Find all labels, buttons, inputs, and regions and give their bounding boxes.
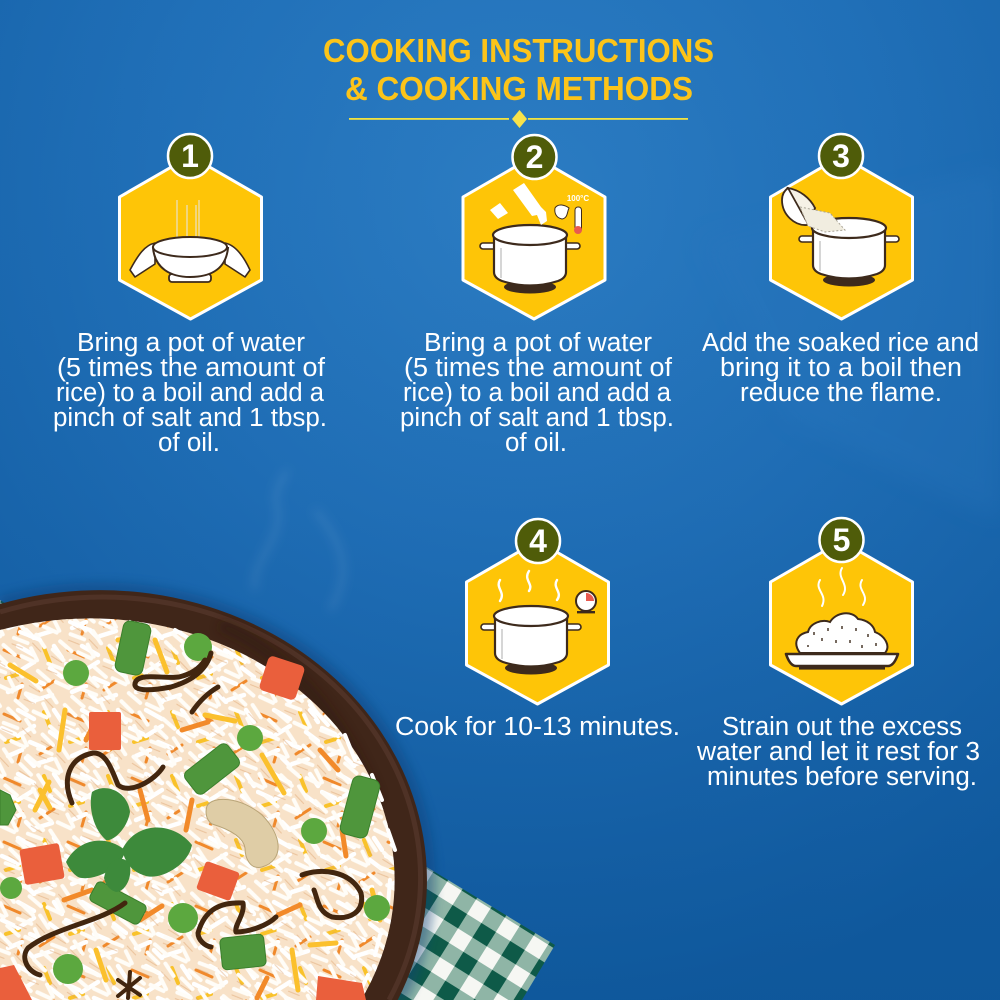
fried onion strands <box>25 653 362 998</box>
text: Bring a pot of water <box>424 329 653 357</box>
hexagon <box>120 156 262 319</box>
text: bring it to a boil then <box>720 354 962 382</box>
carrot cubes <box>0 655 366 1000</box>
mint leaves <box>66 788 192 892</box>
hexagon <box>770 541 912 704</box>
icon: bowl with rice <box>130 200 250 282</box>
number badge: 1 <box>181 138 199 174</box>
number badge <box>512 135 556 179</box>
number badge: 2 <box>526 139 543 175</box>
step 5 <box>696 518 980 791</box>
text <box>696 713 980 791</box>
text: water and let it rest for 3 <box>696 738 980 766</box>
green beans <box>0 620 381 970</box>
checked cloth <box>0 600 555 1000</box>
bowl of rice <box>0 582 435 1000</box>
step 1 <box>53 134 327 457</box>
title: & COOKING METHODS <box>345 71 693 108</box>
bowl <box>0 582 435 1000</box>
text <box>702 329 979 407</box>
text: Bring a pot of water <box>77 329 306 357</box>
number badge <box>819 134 863 178</box>
text: of oil. <box>158 429 220 457</box>
steam above the bowl <box>255 470 343 610</box>
text <box>400 329 674 457</box>
text: rice) to a boil and add a <box>56 379 325 407</box>
text: Add the soaked rice and <box>702 329 979 357</box>
number badge: 4 <box>529 523 547 559</box>
text: (5 times the amount of <box>404 354 673 382</box>
text: of oil. <box>505 429 567 457</box>
number badge: 3 <box>832 138 850 174</box>
step 4 <box>395 519 680 741</box>
text: (5 times the amount of <box>57 354 326 382</box>
hexagon <box>466 541 608 704</box>
hexagon <box>463 156 605 319</box>
number badge: 5 <box>833 522 850 558</box>
icon: pot with salt, oil and thermometer <box>480 183 589 294</box>
step 2 <box>400 135 674 457</box>
text: pinch of salt and 1 tbsp. <box>53 404 327 432</box>
icon: pot with steam and timer <box>481 571 596 674</box>
number badge <box>820 518 864 562</box>
text: Cook for 10-13 minutes. <box>395 713 680 741</box>
text: Strain out the excess <box>722 713 962 741</box>
icon: pot with salt, oil and thermometer: 100°C <box>567 194 589 203</box>
step 3 <box>702 134 979 407</box>
title: COOKING INSTRUCTIONS <box>323 33 714 70</box>
icon: pot with rice poured from bowl <box>782 188 899 286</box>
number badge <box>168 134 212 178</box>
text: minutes before serving. <box>707 763 977 791</box>
hexagon <box>770 156 912 319</box>
icon: plate of rice with steam <box>786 568 898 670</box>
peas <box>0 633 390 984</box>
text: reduce the flame. <box>740 379 942 407</box>
number badge <box>516 519 560 563</box>
title <box>323 33 714 128</box>
text: pinch of salt and 1 tbsp. <box>400 404 674 432</box>
text: rice) to a boil and add a <box>403 379 672 407</box>
text <box>53 329 327 457</box>
rice <box>0 618 395 1000</box>
cashew <box>206 799 278 867</box>
